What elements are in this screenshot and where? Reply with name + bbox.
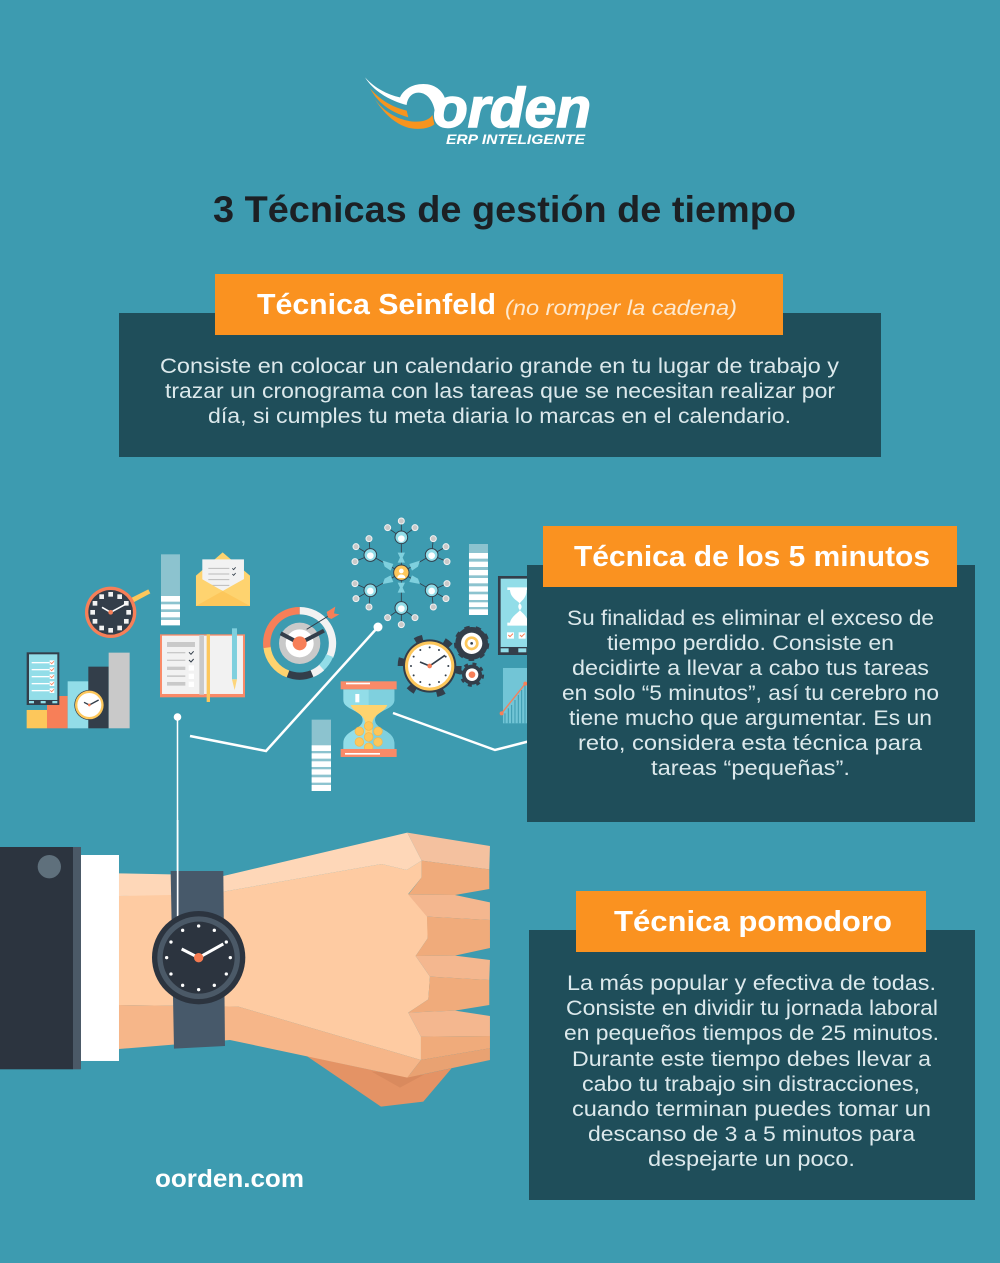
panel: técnica Seinfeld: (no romper la cadena) [505,297,737,320]
panel: técnica de los 5 minutos: reto, considera esta técnica para [578,731,922,755]
icons: left group [27,552,250,728]
icon: line chart [500,668,528,723]
icon: notebook [160,628,245,702]
icons: centre group [267,518,531,791]
panel: técnica pomodoro: cabo tu trabajo sin distracciones, [582,1072,920,1096]
panel: técnica de los 5 minutos: en solo “5 minutos”, así tu cerebro no [562,681,939,705]
connector lines [174,622,530,917]
panel: técnica de los 5 minutos: tareas “pequeñas”. [651,756,850,780]
icon: clock with gears [401,627,488,695]
panel: técnica pomodoro [529,891,975,1200]
panel: técnica pomodoro: Durante este tiempo debes llevar a [572,1047,931,1071]
panel: técnica de los 5 minutos: decidirte a llevar a cabo tus tareas [572,656,929,680]
icon: envelope [196,552,250,606]
icon: striped bar [161,554,180,625]
panel: técnica pomodoro: Consiste en dividir tu jornada laboral [566,996,938,1020]
panel: técnica de los 5 minutos [527,526,975,822]
panel: técnica de los 5 minutos: tiene mucho que argumentar. Es un [569,706,932,730]
panel: técnica pomodoro: en pequeños tiempos de 25 minutos. [564,1021,939,1045]
logo: Oorden: ERP INTELIGENTE [446,131,586,147]
icon: striped bars [312,544,488,791]
logo: Oorden: orden [433,76,591,139]
panel: técnica pomodoro: cuando terminan puedes tomar un [572,1097,931,1121]
illustration: arm with wristwatch [0,820,490,1107]
icon: wall clock [85,587,150,638]
title: 3 Técnicas de gestión de tiempo [213,189,796,230]
panel: técnica pomodoro: despejarte un poco. [648,1147,855,1171]
panel: técnica Seinfeld: día, si cumples tu meta diaria lo marcas en el calendario. [208,404,791,428]
panel: técnica Seinfeld: Técnica Seinfeld [257,289,496,321]
panel: técnica Seinfeld: Consiste en colocar un calendario grande en tu lugar de trabajo y [160,354,839,378]
panel: técnica de los 5 minutos: tiempo perdido. Consiste en [607,631,894,655]
panel: técnica pomodoro: Técnica pomodoro [614,906,892,938]
panel: técnica pomodoro: descanso de 3 a 5 minutos para [588,1122,915,1146]
logo: Oorden [365,76,591,147]
icon: hourglass [341,681,397,757]
panel: técnica pomodoro: La más popular y efectiva de todas. [567,971,936,995]
icon: target [267,607,339,676]
panel: técnica de los 5 minutos: Su finalidad es eliminar el exceso de [567,606,934,630]
panel: técnica Seinfeld: trazar un cronograma con las tareas que se necesitan realizar por [165,379,835,403]
icon: monitor [498,576,531,655]
website footer: oorden.com [155,1165,304,1193]
panel: técnica Seinfeld [119,274,881,457]
panel: técnica de los 5 minutos: Técnica de los 5 minutos [574,541,930,573]
icon: network [352,518,450,628]
icon: bar chart with phone and clock [27,652,130,728]
